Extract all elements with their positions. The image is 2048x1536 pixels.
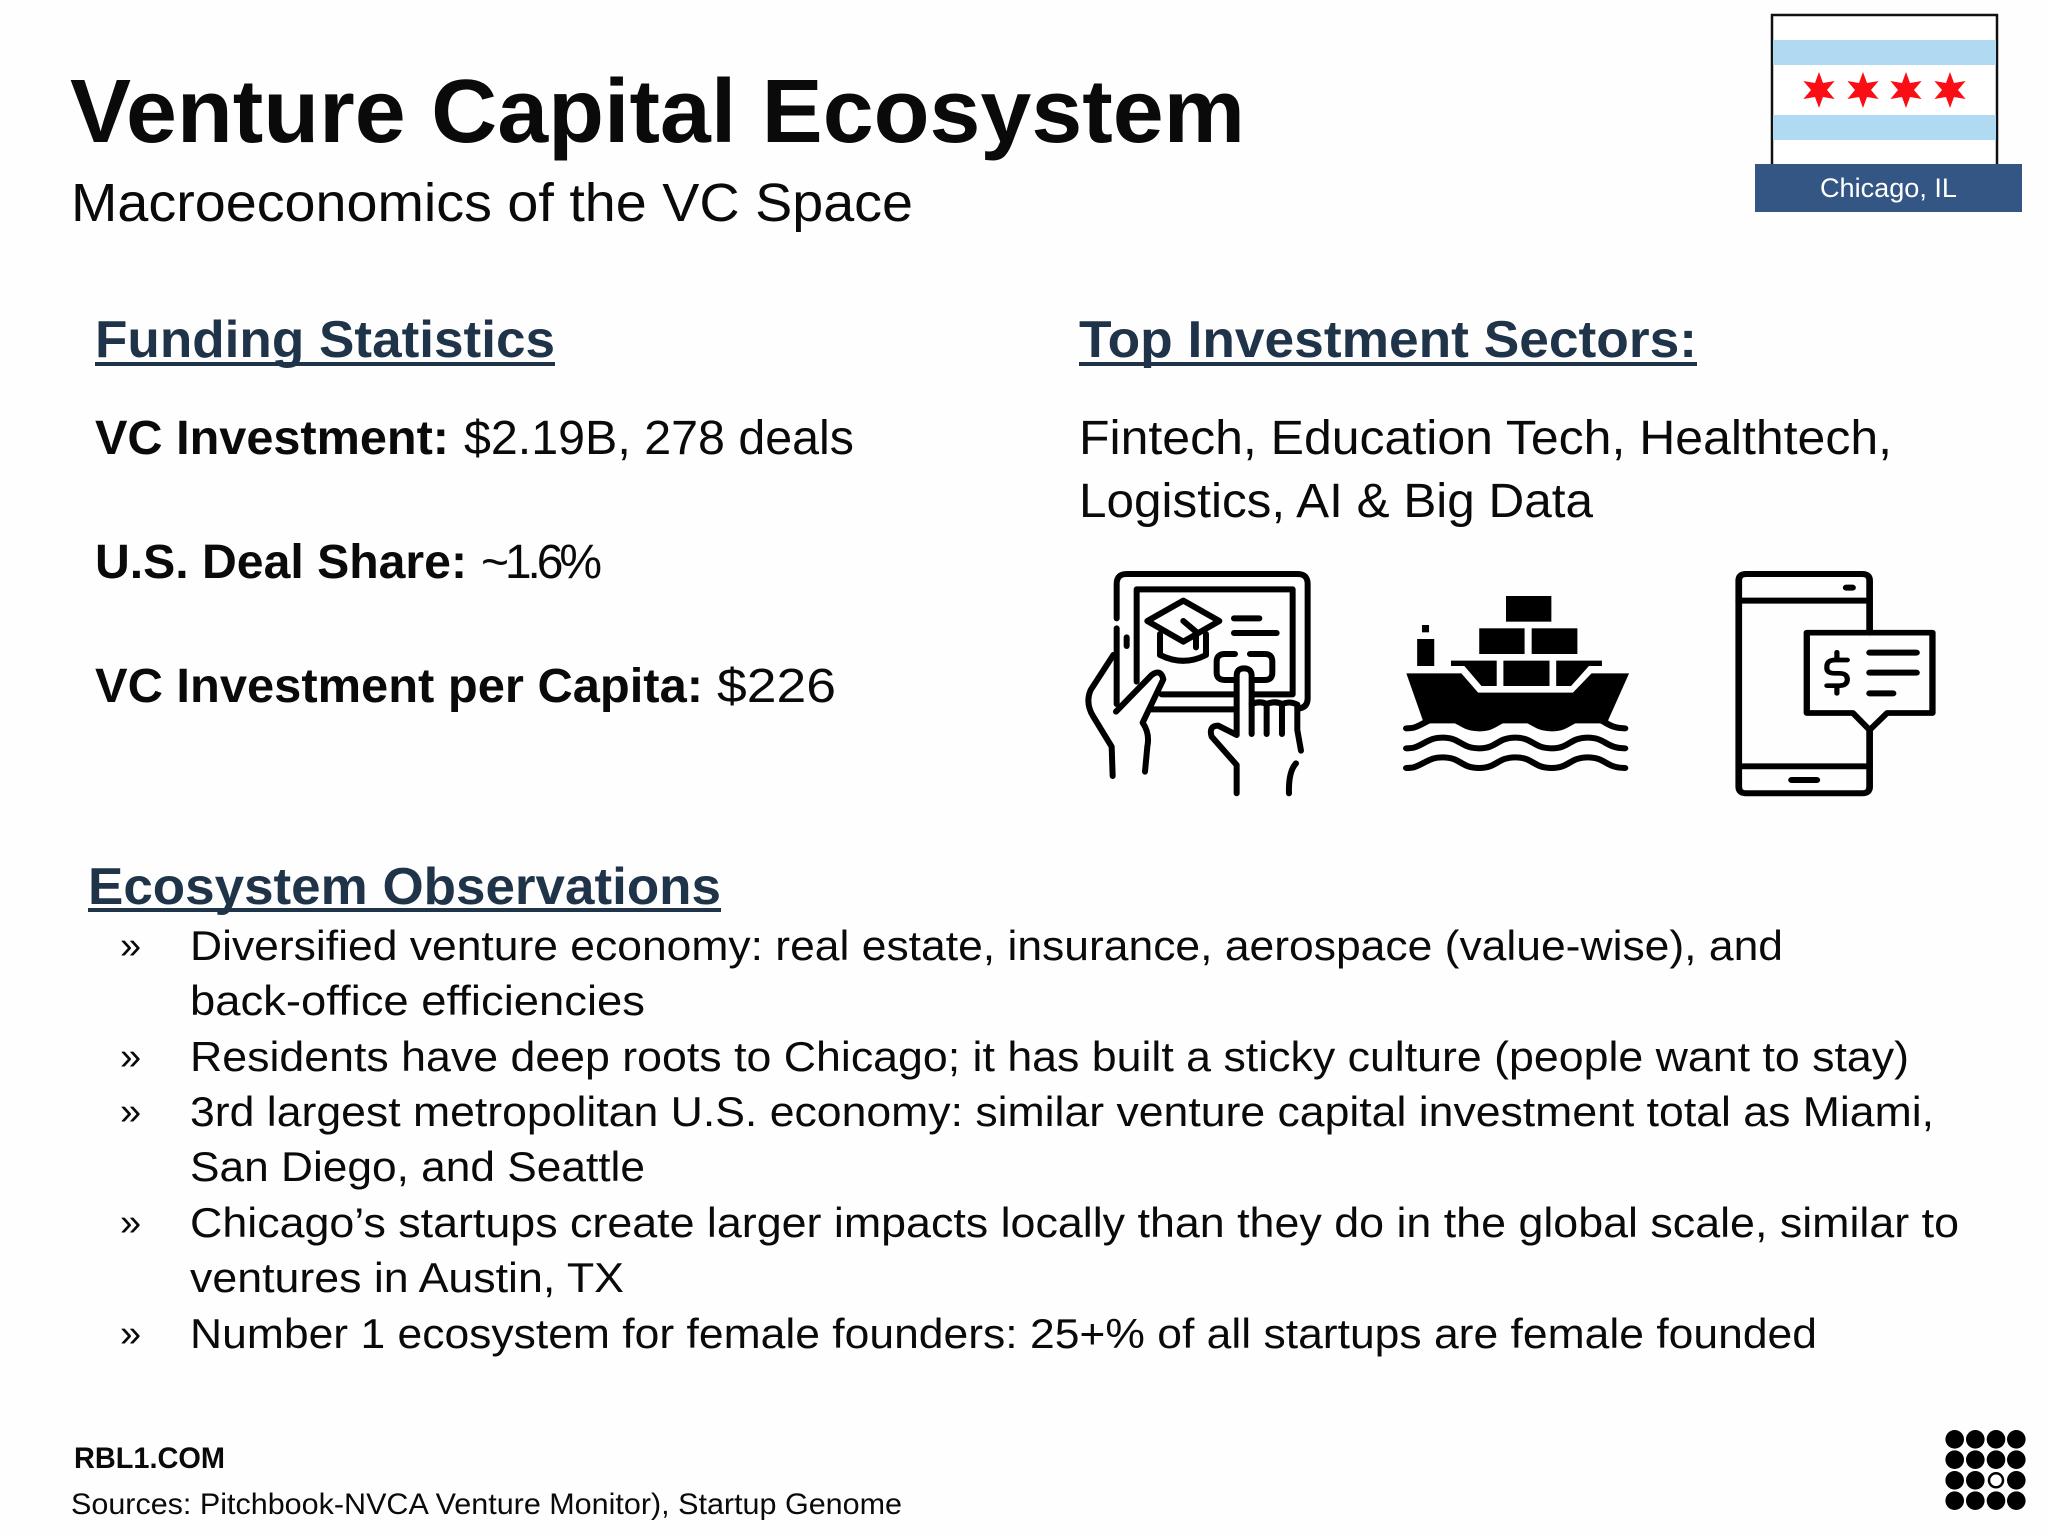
icon: smartphone with payment message	[1739, 574, 1932, 793]
icon: container ship	[1406, 596, 1629, 768]
observation 3: »	[120, 1091, 141, 1133]
observation 5: »	[120, 1313, 141, 1355]
stat: VC investment: VC Investment:	[95, 412, 449, 465]
brand name: RBL1.COM	[74, 1442, 225, 1475]
heading: ecosystem observations: Ecosystem Observations	[88, 858, 721, 916]
observation 2: »	[120, 1036, 141, 1078]
panel: ecosystem observations	[88, 858, 1959, 1357]
sectors list	[1079, 412, 1892, 528]
panel: top investment sectors	[1079, 311, 1932, 793]
heading: top investment sectors: Top Investment Sectors:	[1079, 311, 1697, 369]
sectors list: Logistics, AI & Big Data	[1079, 475, 1593, 528]
sectors list: Fintech, Education Tech, Healthtech,	[1079, 412, 1892, 465]
observation 3: San Diego, and Seattle	[190, 1143, 645, 1190]
observation 1: back-office efficiencies	[190, 977, 645, 1024]
observation 5: Number 1 ecosystem for female founders: 25+% of all startups are female founded	[190, 1310, 1817, 1357]
observation 3	[120, 1088, 1934, 1190]
sources: Sources: Pitchbook-NVCA Venture Monitor), Startup Genome	[71, 1488, 902, 1521]
title: Venture Capital Ecosystem	[70, 62, 1245, 162]
stat: U.S. deal share: ~1.6%	[481, 536, 602, 589]
icon: Chicago flag with location label	[1755, 15, 2022, 212]
observation 4	[120, 1199, 1959, 1301]
observation 4: ventures in Austin, TX	[190, 1254, 624, 1301]
icon: Chicago flag with location label: Chicago, IL	[1820, 173, 1957, 203]
observation 4: Chicago’s startups create larger impacts locally than they do in the global scale, similar to	[190, 1199, 1959, 1246]
observation 1: »	[120, 925, 141, 967]
stat: VC investment: $2.19B, 278 deals	[464, 412, 854, 465]
stat: U.S. deal share: U.S. Deal Share:	[95, 536, 467, 589]
observation 1	[120, 922, 1783, 1024]
stat: VC investment per capita: VC Investment per Capita:	[95, 660, 703, 713]
heading: funding statistics: Funding Statistics	[95, 311, 555, 369]
observation 2: Residents have deep roots to Chicago; it has built a sticky culture (people want to stay)	[190, 1033, 1909, 1080]
panel: funding statistics	[95, 311, 854, 713]
observation 3: 3rd largest metropolitan U.S. economy: similar venture capital investment total as Miami,	[190, 1088, 1934, 1135]
observation 4: »	[120, 1202, 141, 1244]
stat: VC investment	[95, 412, 854, 465]
subtitle: Macroeconomics of the VC Space	[71, 173, 913, 233]
stat: VC investment per capita: $226	[717, 660, 836, 713]
icon: RBL dot logo	[1945, 1430, 2026, 1510]
icon: education tablet with hands	[1088, 574, 1308, 793]
observation 1: Diversified venture economy: real estate, insurance, aerospace (value-wise), and	[190, 922, 1783, 969]
